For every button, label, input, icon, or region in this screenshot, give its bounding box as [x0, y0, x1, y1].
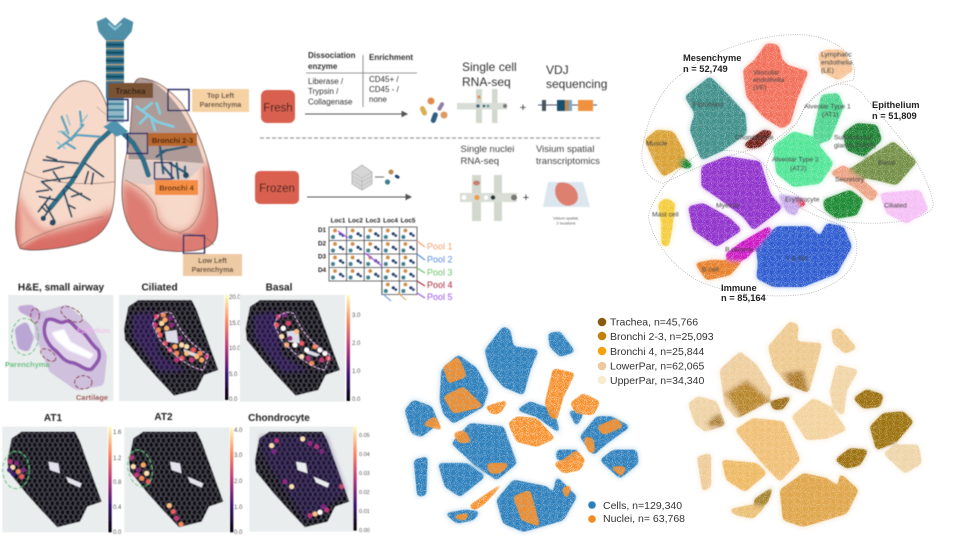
Frozen box	[255, 171, 299, 204]
pool labels: Pool 2	[427, 254, 453, 264]
panel: Chondrocyte: 0.04	[359, 452, 370, 458]
heading: Single nuclei RNA-seq	[460, 144, 514, 167]
panel: Basal: 3.0	[352, 313, 361, 319]
cell type labels: Submucosal	[834, 134, 872, 142]
legend row: Nuclei: Nuclei, n= 63,768	[603, 513, 685, 525]
panel: AT2	[124, 412, 243, 536]
plus: +	[520, 102, 526, 114]
pool labels: Pool 3	[427, 268, 453, 278]
grid row labels: D1	[318, 227, 327, 234]
panel: AT1: 0.8	[113, 480, 122, 486]
spatial transcriptomics panels	[2, 282, 370, 536]
panel: H&E small airway: Epithelium	[77, 328, 110, 335]
cell type labels: Vascular	[753, 70, 780, 76]
heading: Single cell RNA-seq: Single cell	[462, 60, 517, 74]
compartment headings: Immune	[721, 283, 757, 293]
legend row: LowerPar: LowerPar, n=62,065	[610, 360, 704, 372]
cell type labels: Ciliated	[884, 202, 907, 210]
panel: AT2: 0.0	[234, 530, 243, 536]
panel: Chondrocyte	[248, 413, 370, 534]
grid cells	[329, 227, 417, 301]
grid column labels: Loc4	[383, 218, 398, 224]
cell type labels: (AT1)	[822, 112, 838, 118]
cell type labels: T & NK	[786, 256, 808, 262]
icon: Visium slide with tissue	[543, 182, 590, 207]
panel: Chondrocyte: 0.00	[359, 528, 370, 534]
plus: +	[523, 192, 529, 204]
panel: AT2: AT2	[154, 412, 173, 423]
panel: AT1: 0.0	[113, 530, 122, 536]
heading: VDJ sequencing: sequencing	[546, 77, 607, 91]
cell type labels: Mast cell	[652, 212, 679, 218]
Frozen box: Frozen	[259, 183, 295, 195]
label: Trachea: Trachea	[115, 87, 146, 96]
label: Top Left Parenchyma	[192, 89, 249, 112]
pool labels: Pool 4	[427, 280, 453, 290]
label: Low Left Parenchyma: Parenchyma	[192, 267, 233, 274]
panel: Chondrocyte: 0.05	[359, 433, 370, 439]
pooling grid	[318, 218, 453, 302]
divider	[260, 137, 600, 139]
legend: anatomical location	[598, 316, 714, 387]
cell type labels: (AT2)	[790, 166, 806, 172]
cell type labels: B plasma	[725, 246, 754, 254]
compartment headings: n = 51,809	[872, 111, 917, 121]
label: Trachea	[108, 83, 153, 98]
panel: AT1: 1.2	[113, 456, 122, 462]
icon: microfluidic chip	[457, 89, 507, 123]
panel: AT1	[2, 413, 122, 536]
grid row labels: D2	[318, 240, 327, 248]
compartment headings: n = 52,749	[683, 64, 728, 74]
compartment headings: Mesenchyme	[683, 53, 741, 63]
panel: Basal: 2.0	[352, 341, 361, 347]
lung anatomy diagram	[10, 17, 249, 276]
grid column labels: Loc1	[331, 218, 346, 224]
Fresh box: Fresh	[263, 102, 293, 114]
panel: Basal	[240, 282, 361, 403]
left lung shape	[120, 77, 219, 253]
heading: Single nuclei RNA-seq: RNA-seq	[460, 156, 499, 167]
heading: Single cell RNA-seq: RNA-seq	[462, 75, 511, 89]
legend row: Trachea: Trachea, n=45,766	[610, 316, 698, 328]
panel: Chondrocyte: Chondrocyte	[248, 413, 310, 424]
panel: AT2: 4.0	[234, 428, 243, 434]
Visium caption: Visium spatial,	[553, 216, 579, 220]
Visium caption	[553, 216, 579, 226]
panel: Basal: 0.0	[352, 397, 361, 403]
panel: Ciliated: 10.0	[229, 346, 241, 352]
heading: Single nuclei RNA-seq: Single nuclei	[460, 144, 514, 155]
airway tree, right	[37, 112, 113, 226]
cell type labels: (LE)	[821, 68, 834, 74]
cell type labels: Erythrocyte	[785, 196, 820, 204]
arrow: fresh	[305, 112, 407, 116]
panel: Ciliated: 5.0	[229, 372, 238, 378]
legend row: UpperPar: UpperPar, n=34,340	[610, 375, 704, 387]
compartment headings	[683, 53, 920, 303]
grid column labels: Loc3	[366, 218, 381, 224]
label: Bronchi 2-3: Bronchi 2-3	[152, 136, 193, 145]
icon: VDJ gene	[538, 100, 597, 111]
label: Bronchi 2-3	[148, 133, 197, 146]
cell type labels: Secretory	[835, 176, 865, 184]
right lung shape	[10, 81, 115, 260]
UMAP by cells vs nuclei	[405, 327, 638, 532]
panel: H&E small airway	[5, 282, 113, 402]
cell type labels: Alveolar Type 1	[804, 104, 851, 110]
heading: VDJ sequencing	[546, 63, 607, 91]
dissociation table: Enrichment	[369, 53, 413, 62]
panel: AT2: 2.0	[234, 479, 243, 485]
label: Top Left Parenchyma: Parenchyma	[200, 102, 241, 109]
grid row labels	[318, 227, 327, 274]
legend row: Bronchi 2-3: Bronchi 2-3, n=25,093	[610, 331, 714, 343]
label: Top Left Parenchyma: Top Left	[207, 93, 235, 100]
pool labels: Pool 5	[427, 292, 453, 302]
panel: AT1: AT1	[44, 413, 63, 424]
airway tree, left	[120, 103, 189, 178]
cell type labels: Chondrocyte	[735, 134, 774, 142]
cell type labels: B cell	[702, 266, 719, 274]
compartment outlines	[642, 35, 933, 296]
icon: nuclei chip	[460, 175, 517, 221]
panel: Chondrocyte: 0.03	[359, 471, 370, 477]
label: Low Left Parenchyma: Low Left	[198, 258, 228, 265]
orange nuclei clusters	[422, 357, 627, 527]
cell type labels: endothelia	[753, 77, 785, 84]
panel: Ciliated: 20.0	[229, 295, 241, 301]
panel: Ciliated	[119, 282, 241, 403]
grid column labels	[331, 218, 416, 224]
label: Bronchi 4	[155, 180, 198, 195]
dissociation table: Liberase /	[308, 77, 344, 86]
cell type labels: Fibroblast	[693, 102, 723, 108]
dissociation table: none	[369, 95, 387, 104]
heading: Visium spatial transcriptomics	[536, 144, 600, 167]
panel: Ciliated: 0.0	[229, 397, 238, 403]
panel: AT1: 0.4	[113, 505, 122, 511]
grid row labels: D4	[318, 267, 327, 274]
dissociation table: Trypsin /	[308, 87, 339, 96]
panel: Basal: Basal	[266, 282, 293, 294]
panel: Ciliated: 15.0	[229, 321, 241, 327]
label: Low Left Parenchyma	[183, 254, 242, 276]
panel: H&E small airway: H&E, small airway	[18, 282, 105, 294]
grid row labels: D3	[318, 254, 327, 260]
compartment headings: Epithelium	[872, 100, 920, 110]
cell type labels: Alveolar Type 2	[772, 156, 819, 164]
cell type labels	[646, 52, 907, 274]
arrow: frozen	[307, 194, 411, 200]
panel: AT2: 3.0	[234, 453, 243, 459]
dissociation table: enzyme	[308, 62, 338, 71]
icon: frozen tissue stack	[352, 165, 400, 190]
coloured clusters	[645, 43, 928, 287]
heading: Visium spatial transcriptomics: Visium spatial	[536, 144, 594, 155]
panel: AT1: 1.6	[113, 430, 122, 436]
trachea	[97, 17, 133, 137]
panel: H&E small airway: Parenchyma	[5, 360, 50, 369]
pool labels	[427, 242, 453, 302]
dissociation table: Dissociation	[308, 51, 356, 60]
workflow diagram	[255, 51, 607, 302]
panel: Ciliated: Ciliated	[141, 282, 178, 294]
cell type labels: Myeloid	[716, 202, 740, 210]
legend row: Cells: Cells, n=129,340	[603, 500, 682, 512]
dissociation table: CD45 - /	[369, 85, 400, 94]
panel: H&E small airway: Cartilage	[76, 393, 108, 402]
dissociation table: CD45+ /	[369, 75, 399, 84]
grid column labels: Loc5	[401, 218, 416, 224]
pool labels: Pool 1	[427, 242, 453, 252]
panel: Chondrocyte: 0.01	[359, 509, 370, 515]
Visium caption: 2 locations	[556, 220, 576, 226]
heading: VDJ sequencing: VDJ	[546, 63, 569, 77]
dissociation table: Collagenase	[308, 98, 353, 106]
heading: Single cell RNA-seq	[462, 60, 517, 89]
label: Bronchi 4: Bronchi 4	[159, 184, 195, 192]
panel: Chondrocyte: 0.02	[359, 490, 370, 496]
blue cell clusters	[405, 327, 638, 532]
cell type labels: Basal	[878, 160, 895, 166]
grid column labels: Loc2	[348, 218, 363, 224]
pool arrows	[417, 241, 425, 298]
heading: Visium spatial transcriptomics: transcriptomics	[536, 156, 600, 167]
panel: AT2: 1.0	[234, 505, 243, 511]
cell type labels: Lymphatic	[821, 52, 852, 58]
Fresh box	[261, 90, 295, 123]
UMAP by anatomical location	[688, 322, 922, 527]
cell type labels: endothelia	[821, 60, 853, 66]
cell type labels: glands (SMG)	[834, 142, 876, 150]
cell type labels: Muscle	[646, 140, 668, 148]
sampling location squares	[108, 90, 204, 254]
compartment headings: n = 85,164	[721, 293, 767, 303]
icon: cells	[419, 98, 448, 124]
panel: Basal: 1.0	[352, 369, 361, 375]
legend row: Bronchi 4: Bronchi 4, n=25,844	[610, 346, 704, 358]
annotated UMAP of cell types	[642, 35, 933, 303]
cell type labels: (VE)	[753, 84, 767, 92]
dissociation table	[306, 51, 417, 107]
legend: cells and nuclei	[588, 500, 685, 525]
